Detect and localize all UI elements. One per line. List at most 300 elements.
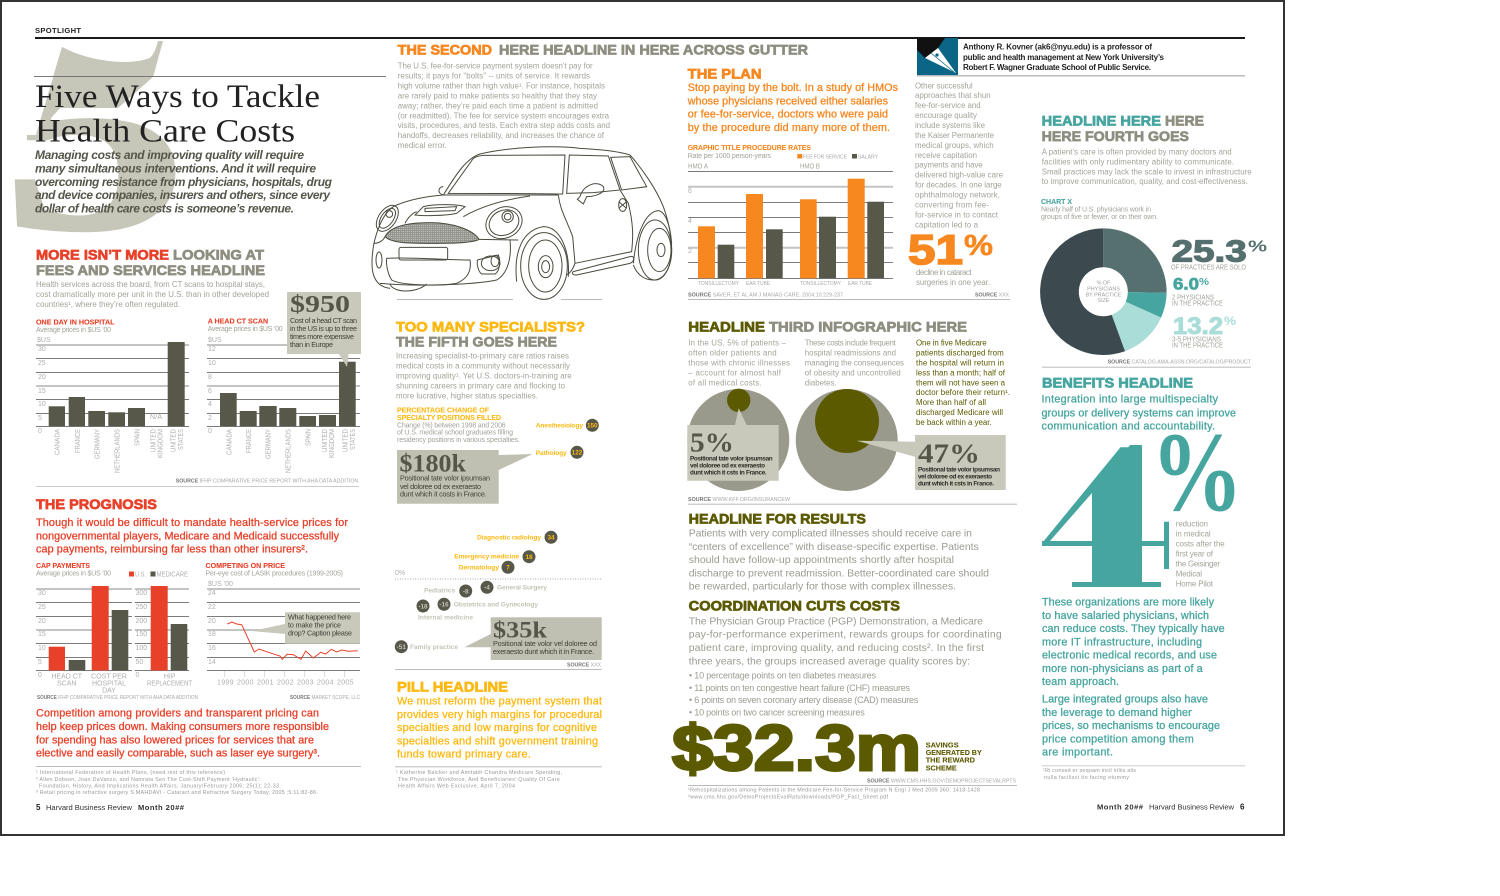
callout: $950: Cost of a head CT scan xyxy=(290,316,357,325)
heading xyxy=(396,318,585,350)
conclusion text: are important. xyxy=(1042,747,1113,759)
subtitle: and device companies, insurers and others, since every xyxy=(35,188,331,202)
proportional circle: 5%: 5% xyxy=(690,428,734,458)
lead text xyxy=(1042,394,1236,432)
text column 2 xyxy=(805,339,904,388)
results text: Patients with very complicated illnesses should receive care in xyxy=(689,528,972,540)
lead text: nongovernmental players, Medicare and Medicaid successfully xyxy=(36,530,340,542)
panel: fourth headline and donut: SOURCE CATALOG.AMA-ASSN.ORG/CATALOG/PRODUCT xyxy=(1108,359,1252,365)
body text: A patient’s care is often provided by many doctors and xyxy=(1042,147,1232,156)
bar chart: cap payments: REPLACEMENT xyxy=(147,680,193,688)
text column 2: diabetes. xyxy=(805,378,837,388)
body text: away; rather, they’re paid each time a patient is admitted xyxy=(398,102,598,110)
heading: HEADLINE xyxy=(688,319,765,335)
footnotes xyxy=(36,770,318,796)
bar chart: cap payments: 10 xyxy=(38,645,46,652)
bar chart: one day in hospital: 20 xyxy=(38,374,46,381)
panel: second headline and car xyxy=(372,41,808,300)
bar chart: cap payments: HOSPITAL xyxy=(92,680,126,688)
chart title: PERCENTAGE CHANGE OF xyxy=(397,405,489,414)
text column: other approaches: include systems like xyxy=(915,121,986,130)
text column 3: the hospital will return in xyxy=(916,358,1004,368)
source: SOURCE IFHP COMPARATIVE PRICE REPORT WITH AHA DATA ADDITION xyxy=(176,479,358,485)
line chart: competing on price: 2002 xyxy=(277,680,294,687)
panel: too many specialists: SOURCE XXX xyxy=(567,663,601,669)
bar chart: one day in hospital: Average prices in $US ’00 xyxy=(36,327,111,334)
callout: $950: than in Europe xyxy=(290,340,333,349)
heading: PILL HEADLINE xyxy=(397,678,508,694)
bar chart: procedure rates: 4 xyxy=(688,218,692,225)
text column 2: hospital readmissions and xyxy=(805,348,896,358)
bar chart: cap payments: SOURCE IFHP COMPARATIVE PRICE REPORT WITH AHA DATA ADDITION xyxy=(37,695,198,701)
footnotes: ¹Ri consed er sequam incil iriliis alis xyxy=(1043,768,1136,774)
bar chart: cap payments: CAP PAYMENTS xyxy=(36,561,90,570)
bullet list xyxy=(689,670,919,717)
bar chart: procedure rates: TONSILLECTOMY xyxy=(800,281,841,287)
panel: third infographic: SOURCE WWW.KFF.ORG/INSURANCEW xyxy=(688,497,791,503)
negative specialties: Pediatrics xyxy=(424,588,455,595)
callout: price drop xyxy=(252,612,360,644)
bar chart: head CT scan: CANADA xyxy=(226,429,234,455)
stat: 6.0%: 6.0 xyxy=(1173,274,1199,293)
bar chart: cap payments: 20 xyxy=(38,618,46,625)
conclusion text: help keep prices down. Making consumers more responsible xyxy=(36,721,329,733)
stat: 6.0%: % xyxy=(1199,277,1209,288)
panel: results and coordination: SOURCE WWW.CMS.HHS.GOV/DEMOPROJECTSEVALRPTS xyxy=(867,779,1016,785)
footnotes: ¹ Katherine Baicker and Amitabh Chandra Medicare Spending, xyxy=(396,770,562,776)
bar chart: one day in hospital: 5 xyxy=(38,415,42,422)
bar chart: head CT scan: 2 xyxy=(208,415,212,422)
footnotes: nulla facilisci tio facing etummy xyxy=(1044,775,1129,781)
positive specialties: Diagnostic radiology xyxy=(477,534,541,541)
bar chart: procedure rates: 2 xyxy=(688,248,692,255)
bar chart: one day in hospital: SPAIN xyxy=(134,429,142,446)
stat: 51% xyxy=(908,226,993,287)
text column: other approaches: approaches that shun xyxy=(915,91,991,100)
stat: 4%: the Geisinger xyxy=(1176,560,1220,568)
author box: Anthony R. Kovner (ak6@nyu.edu) is a professor of xyxy=(963,42,1152,51)
heading: LOOKING AT xyxy=(173,246,264,262)
body text: more lucrative, higher status specialties. xyxy=(396,392,538,400)
body text: handoffs, decreases reliability, and increases the chance of xyxy=(398,131,605,140)
negative specialties: Family practice xyxy=(410,644,458,651)
heading: MORE ISN’T MORE xyxy=(36,246,169,262)
footnotes xyxy=(396,770,562,790)
chart title: Change (%) between 1998 and 2006 xyxy=(397,422,506,429)
body text: are rarely paid to make patients so healthy that they stay xyxy=(398,92,597,100)
bar chart: head CT scan: NETHERLANDS xyxy=(286,429,292,473)
panel: results and coordination xyxy=(672,510,1017,800)
bar chart: procedure rates: SOURCE SAVER, ET AL AM J MANAG CARE. 2004;10:229-237 xyxy=(688,293,843,299)
callout: $950 xyxy=(287,292,361,367)
bar chart: procedure rates: TONSILLECTOMY xyxy=(698,281,739,287)
text column: other approaches: fee-for-service and xyxy=(915,101,981,110)
positive specialties xyxy=(454,419,599,574)
text column 1: often older patients and xyxy=(688,348,777,358)
coordination text: The Physician Group Practice (PGP) Demonstration, a Medicare xyxy=(689,615,983,627)
folio right xyxy=(1097,802,1245,811)
callout: $950: times more expensive xyxy=(290,332,354,341)
text column: other approaches: for-service in to contact xyxy=(915,210,999,219)
body text xyxy=(396,352,572,400)
text column 1: those with chronic illnesses xyxy=(688,358,790,368)
body text: visits, procedures, and tests. Each extra step adds costs and xyxy=(398,121,610,130)
panel: the plan xyxy=(687,65,1010,300)
bar chart: head CT scan: $US xyxy=(208,337,222,344)
bar chart: one day in hospital: NETHERLANDS xyxy=(114,429,122,473)
bar chart: head CT scan: 10 xyxy=(208,360,216,367)
footnotes: ² Allen Dobson, Joan DaVanzo, and Namrata Sen The Cost-Shift Payment ’Hydraulic’: xyxy=(36,777,261,783)
text column: other approaches: payments and have xyxy=(915,161,983,170)
conclusion text: more IT infrastructure, including xyxy=(1042,636,1202,648)
conclusion text: Large integrated groups also have xyxy=(1042,694,1208,706)
bar chart: cap payments: 50 xyxy=(136,659,143,666)
folio right: Harvard Business Review xyxy=(1149,802,1235,811)
bar chart: cap payments: HIP xyxy=(164,674,176,680)
body text: results; it pays for “bolts” -- units of service. It rewards xyxy=(398,72,590,80)
heading: THE PLAN xyxy=(688,65,762,81)
text column 3: them will not have seen a xyxy=(916,378,1006,387)
callout: $950: in the US is up to three xyxy=(290,324,357,333)
line chart: competing on price: SOURCE MARKET SCOPE, LLC xyxy=(290,695,360,701)
panel: third infographic xyxy=(687,319,1017,505)
bar chart: head CT scan: 8 xyxy=(208,374,212,381)
conclusion text: These organizations are more likely xyxy=(1042,597,1215,609)
legend xyxy=(797,154,878,160)
line chart: competing on price: COMPETING ON PRICE xyxy=(206,561,285,570)
spotlight header: SPOTLIGHT xyxy=(35,26,81,35)
bar chart: head CT scan: FRANCE xyxy=(246,429,253,453)
text column 3: doctor before their return¹. xyxy=(916,388,1010,397)
legend: FEE FOR SERVICE xyxy=(803,154,847,160)
bar chart: head CT scan: 6 xyxy=(208,388,212,395)
results text: should have follow-up appointments shortly after hospital xyxy=(689,554,954,566)
intro text: cost dramatically more per unit in the U.S. than in other developed xyxy=(36,290,269,299)
bar chart: one day in hospital: KINGDOM xyxy=(158,429,164,458)
title: Five Ways to Tackle xyxy=(35,79,320,115)
footnotes: Foundation, History, And Implications Health Affairs, January/February 2006; 25(1): 22-33. xyxy=(39,784,281,790)
text column: other approaches: receive capitation xyxy=(915,151,977,160)
stat: 4%: 4 xyxy=(1040,400,1171,632)
callout: price drop: drop? Caption please xyxy=(288,628,352,637)
lead text xyxy=(687,82,899,134)
icon: pen nib xyxy=(917,38,958,75)
bar chart: one day in hospital: STATES xyxy=(178,429,185,450)
bar chart: procedure rates: EAR TUBE xyxy=(848,281,872,287)
text column 2: of obesity and uncontrolled xyxy=(805,368,901,378)
coordination text: patient care, improving quality, and reducing costs². In the first xyxy=(689,642,984,654)
line chart: competing on price: 2003 xyxy=(297,680,314,687)
donut chart: % OF xyxy=(1097,280,1111,286)
conclusion text: Competition among providers and transparent pricing can xyxy=(36,708,319,720)
donut chart: SIZE xyxy=(1098,298,1110,304)
callout: $35k: $35k xyxy=(493,618,547,643)
heading: HEADLINE HERE xyxy=(1042,113,1161,129)
footnotes: The Physician Workforce, And Beneficiaries’ Quality Of Care xyxy=(398,777,560,783)
bar chart: procedure rates: HMO A xyxy=(688,164,708,171)
page frame xyxy=(1,1,1284,835)
subtitle: many simultaneous interventions. And it will require xyxy=(35,162,316,176)
conclusion text: price competition among them xyxy=(1042,734,1194,746)
lead text: or fee-for-service, doctors who were paid xyxy=(688,108,888,120)
bar chart: head CT scan: UNITED xyxy=(342,429,350,452)
stat: 4%: Home Pilot xyxy=(1176,580,1214,588)
bar chart: cap payments: 250 xyxy=(136,604,147,611)
stat: 4% xyxy=(1036,400,1243,632)
proportional circle: 5%: Positional tate volor ipsumsan xyxy=(690,456,773,463)
body text xyxy=(398,62,610,150)
donut chart: PHYSICIANS xyxy=(1087,287,1120,293)
panel: the prognosis xyxy=(36,496,361,812)
bar chart: procedure rates: HMO B xyxy=(800,164,820,171)
heading: HERE FOURTH GOES xyxy=(1042,128,1189,144)
line chart: competing on price: 2001 xyxy=(257,680,274,687)
body text: The U.S. fee-for-service payment system doesn’t pay for xyxy=(398,62,593,70)
callout: $180k: $180k xyxy=(400,450,466,477)
negative specialties: Obstetrics and Gynecology xyxy=(454,602,538,609)
line chart: competing on price: 14 xyxy=(208,659,216,666)
text column: other approaches: for decades. In one large xyxy=(915,181,1002,190)
stat: 4%: Medical xyxy=(1176,570,1202,578)
panel: benefits xyxy=(1036,375,1245,811)
chart title: CHART X xyxy=(1041,197,1072,206)
bar chart: cap payments: DAY xyxy=(102,688,116,694)
callout: $35k: Positional tate volor vel doloree od xyxy=(493,639,597,648)
body text: facilities with only rudimentary ability to communicate. xyxy=(1042,157,1234,166)
author box xyxy=(917,38,1245,76)
body text: high volume rather than high value¹. For instance, hospitals xyxy=(398,82,605,90)
folio left: Month 20## xyxy=(138,803,185,812)
panel: too many specialists xyxy=(395,318,602,670)
positive specialties: 122 xyxy=(572,450,583,457)
title xyxy=(35,79,320,150)
results text xyxy=(689,528,989,593)
intro text: Health services across the board, from CT scans to hospital stays, xyxy=(36,280,265,289)
heading: TOO MANY SPECIALISTS? xyxy=(396,318,585,334)
proportional circle: 5%: vel doloree od ex exeraesto xyxy=(690,463,765,470)
negative specialties: -18 xyxy=(418,603,428,610)
bar chart: cap payments: 200 xyxy=(136,618,147,625)
footnotes: Health Affairs Web Exclusive, April 7, 2004 xyxy=(398,784,515,790)
bar chart: cap payments: 0 xyxy=(136,672,140,679)
conclusion text: elective and easily comparable, such as laser eye surgery³. xyxy=(36,748,320,760)
bar chart: cap payments: 100 xyxy=(136,645,147,652)
line chart: competing on price: 16 xyxy=(208,645,216,652)
bullet list: • 10 points on two cancer screening measures xyxy=(689,707,865,717)
stat: 4%: first year of xyxy=(1176,550,1214,558)
proportional circle: 47%: Positional tate volor ipsumsan xyxy=(918,467,1000,474)
bar chart: one day in hospital: 0 xyxy=(38,428,42,435)
bar chart: cap payments: 30 xyxy=(38,590,46,597)
results text: discharge to prevent readmission. Better-coordinated care should xyxy=(689,567,989,579)
heading: THE FIFTH GOES HERE xyxy=(396,334,557,350)
stat: 51%: decline in cataract xyxy=(916,268,972,277)
line chart: competing on price: 2005 xyxy=(337,680,354,687)
callout: $950: $950 xyxy=(290,292,350,318)
line chart: competing on price: 1999 xyxy=(217,680,234,687)
stat: 51%: 51 xyxy=(908,226,963,273)
stat: 25.3%: 25.3 xyxy=(1172,234,1247,269)
positive specialties: 7 xyxy=(506,565,510,572)
lead text: Though it would be difficult to mandate health-service prices for xyxy=(36,517,348,529)
chart title: residency positions in various specialties. xyxy=(397,437,520,444)
footnotes: ¹Rehospitalizations among Patients in the Medicare Fee-for-Service Program N Engl J Med 2009 360: 1418-1428 xyxy=(688,788,980,794)
stat: 4%: reduction xyxy=(1176,520,1208,529)
stat: 25.3%: % xyxy=(1248,239,1267,256)
text column 3: patients discharged from xyxy=(916,349,1004,358)
proportional circle: 5% xyxy=(687,389,789,491)
line chart: competing on price: 2004 xyxy=(317,680,334,687)
footnotes: ²www.cms.hhs.gov/DemoProjectsEvalRpts/downloads/PGP_Fact_Sheet.pdf xyxy=(688,794,888,800)
body text: Small practices may lack the scale to invest in infrastructure xyxy=(1042,167,1252,176)
conclusion text: team approach. xyxy=(1042,676,1119,688)
stat: $32.3m: $32.3m xyxy=(672,712,921,784)
folio left xyxy=(36,803,185,812)
bar chart: head CT scan: A HEAD CT SCAN xyxy=(208,316,268,326)
negative specialties: -16 xyxy=(439,602,449,609)
illustration: car line art xyxy=(372,147,672,299)
stat: 13.2% xyxy=(1172,313,1236,350)
proportional circle: 47%: vel doloree od ex exeraesto xyxy=(918,474,992,481)
lead text: specialties and shift government training xyxy=(397,736,598,748)
bar chart: procedure rates: GRAPHIC TITLE PROCEDURE RATES xyxy=(688,143,811,152)
proportional circle: 5%: dunt which it csts in France. xyxy=(690,470,767,476)
specialty dot chart xyxy=(395,419,601,653)
bar chart: cap payments: 25 xyxy=(38,604,46,611)
text column 1 xyxy=(688,339,790,388)
bar chart: one day in hospital: UNITED xyxy=(170,429,178,452)
stat: 4%: costs after the xyxy=(1176,540,1225,548)
bar chart: one day in hospital xyxy=(36,318,189,473)
text column: other approaches: capitation led to a xyxy=(915,220,979,229)
text column: other approaches: medical groups, which xyxy=(915,141,994,150)
stat: 25.3%: OF PRACTICES ARE SOLO xyxy=(1171,264,1246,271)
bar chart: head CT scan: 4 xyxy=(208,401,212,408)
proportional circle: 47% xyxy=(796,389,1006,491)
heading xyxy=(36,246,265,278)
callout: $180k: dunt which it costs in France. xyxy=(400,490,487,498)
lead text: specialties and low margins for cognitive xyxy=(397,722,597,734)
folio right: 6 xyxy=(1240,802,1245,811)
bar chart: one day in hospital: 15 xyxy=(38,388,46,395)
positive specialties: Emergency medicine xyxy=(454,554,519,561)
conclusion text: for spending has also lowered prices for services that are xyxy=(36,734,314,746)
lead text: We must reform the payment system that xyxy=(397,696,602,708)
heading: FEES AND SERVICES HEADLINE xyxy=(36,262,265,278)
negative specialties: -4 xyxy=(484,585,490,592)
bar chart: one day in hospital: N/A xyxy=(150,414,162,421)
lead text: provides very high margins for procedural xyxy=(397,709,602,721)
stat: 13.2%: % xyxy=(1224,314,1236,328)
bar chart: cap payments: 150 xyxy=(136,631,147,638)
text column: other approaches: Other successful xyxy=(915,81,973,90)
stat: 51%: surgeries in one year. xyxy=(916,278,990,287)
heading: BENEFITS HEADLINE xyxy=(1042,375,1193,391)
chart title: Nearly half of U.S. physicians work in xyxy=(1041,207,1151,214)
text column 2: These costs include frequent xyxy=(805,339,896,348)
conclusion text: to have salaried physicians, which xyxy=(1042,610,1209,622)
text column: other approaches: encourage quality xyxy=(915,111,977,120)
bar chart: cap payments: HEAD CT xyxy=(51,674,83,680)
lead text: cap payments, reimbursing far less than other insurers². xyxy=(36,544,308,556)
bar chart: cap payments xyxy=(36,561,198,701)
lead text: groups or delivery systems can improve xyxy=(1042,407,1236,419)
bar chart: head CT scan: STATES xyxy=(350,429,357,450)
bar chart: one day in hospital: 30 xyxy=(38,346,46,353)
footnotes xyxy=(688,788,980,800)
bar chart: cap payments: Average prices in $US ’00 xyxy=(36,571,111,578)
folio left: Harvard Business Review xyxy=(46,803,133,812)
results text: “centers of excellence” with disease-specific expertise. Patients xyxy=(689,541,979,553)
bar chart: procedure rates: EAR TUBE xyxy=(746,281,770,287)
line chart: competing on price: 22 xyxy=(208,604,216,611)
legend: SALARY xyxy=(858,154,878,160)
line chart: competing on price: 24 xyxy=(208,590,216,597)
stat: 4%: % xyxy=(1151,410,1243,535)
conclusion text: the leverage to demand higher xyxy=(1042,707,1192,719)
donut chart xyxy=(1040,228,1167,355)
legend: U.S. xyxy=(135,572,146,578)
subtitle: overcoming resistance from physicians, hospitals, drug xyxy=(35,175,333,189)
legend xyxy=(129,572,188,578)
panel: pill headline xyxy=(395,678,602,790)
coordination text: three years, the groups increased average quality scores by: xyxy=(689,655,970,667)
bar chart: cap payments: COST PER xyxy=(91,674,127,680)
conclusion text: electronic medical records, and use xyxy=(1042,650,1217,662)
footnotes: ³ Retail pricing in refractive surgery S MAHDAVI - Cataract and Refractive Surgery Today, 2005 ;5:11:82-86. xyxy=(36,790,318,796)
positive specialties: 34 xyxy=(547,535,555,542)
stat: 6.0%: IN THE PRACTICE xyxy=(1172,301,1223,308)
conclusion text: prices, so mechanisms to encourage xyxy=(1042,720,1220,732)
body text: medical error. xyxy=(398,141,447,150)
text column 2: managing the consequences xyxy=(805,358,904,368)
heading: THIRD INFOGRAPHIC HERE xyxy=(769,319,967,335)
bar chart: head CT scan: 0 xyxy=(208,428,212,435)
bar chart: one day in hospital: $US xyxy=(37,337,51,344)
intro text: countries¹, where they’re often regulated. xyxy=(36,300,180,309)
subtitle: dollar of health care costs is someone’s revenue. xyxy=(35,202,294,216)
panel: more isn't more xyxy=(36,246,361,487)
text column 1: – account for almost half xyxy=(688,368,782,378)
text column 1: In the US, 5% of patients – xyxy=(688,339,787,348)
negative specialties: -51 xyxy=(397,644,406,651)
negative specialties: -8 xyxy=(463,588,469,595)
bar chart: cap payments: 300 xyxy=(136,590,147,597)
callout: $180k xyxy=(397,450,533,504)
stat: $32.3m: GENERATED BY xyxy=(926,748,982,757)
lead text xyxy=(36,517,348,556)
positive specialties: Pathology xyxy=(536,450,567,457)
stat: 25.3% xyxy=(1171,234,1267,271)
folio right: Month 20## xyxy=(1097,802,1144,811)
positive specialties: 18 xyxy=(525,554,533,561)
lead text: Stop paying by the bolt. In a study of HMOs xyxy=(688,82,899,94)
folio left: 5 xyxy=(36,803,41,812)
text column 3: less than a month; half of xyxy=(916,368,1006,377)
stat: 51%: % xyxy=(964,230,993,262)
bar chart: head CT scan: 12 xyxy=(208,346,216,353)
body text xyxy=(1042,147,1252,186)
title: Health Care Costs xyxy=(35,114,295,150)
bar chart: one day in hospital: ONE DAY IN HOSPITAL xyxy=(36,318,115,326)
bullet list: • 10 percentage points on ten diabetes measures xyxy=(689,670,876,680)
chart title: groups of five or fewer, or on their own. xyxy=(1041,214,1158,221)
lead text: funds toward primary care. xyxy=(397,749,531,761)
chart title: of U.S. medical school graduates filling xyxy=(397,430,513,437)
line chart: competing on price: $US ’00 xyxy=(208,581,233,588)
body text: Increasing specialist-to-primary care ratios raises xyxy=(396,352,569,361)
author box: Robert F. Wagner Graduate School of Public Service. xyxy=(963,63,1151,72)
